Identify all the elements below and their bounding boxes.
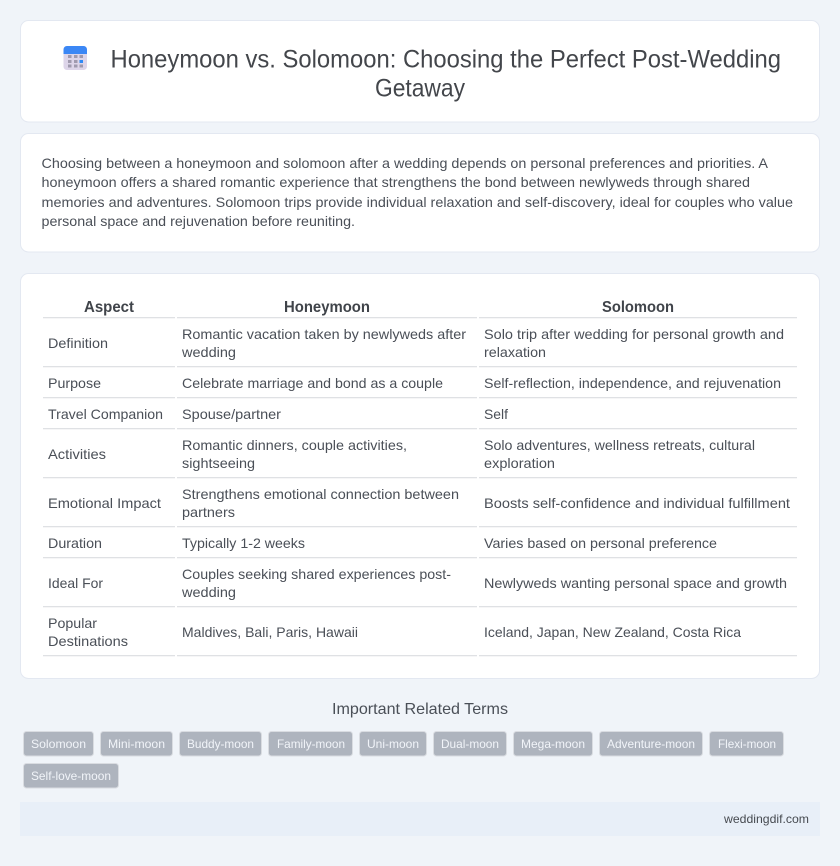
table row: ideal for: Ideal For: [48, 575, 103, 591]
text block: intro paragraph: honeymoon offers a shared romantic experience that strengthens the bond between newlyweds through shared: [42, 174, 750, 190]
table row: popular destinations: Destinations: [48, 633, 128, 649]
table row: definition: [48, 326, 784, 360]
text block: intro paragraph: Choosing between a honeymoon and solomoon after a wedding depends on personal preferences and priorities. A: [42, 155, 769, 171]
table row: activities: Romantic dinners, couple activities,: [182, 437, 407, 453]
table row: emotional impact: Boosts self-confidence and individual fulfillment: [484, 495, 790, 511]
table row: definition: Romantic vacation taken by newlyweds after: [182, 326, 466, 342]
table row: purpose: Purpose: [48, 375, 101, 391]
table row: activities: sightseeing: [182, 455, 255, 471]
table row: popular destinations: Popular: [48, 615, 97, 631]
footer source text: weddingdif.com: [723, 812, 809, 826]
panel: introduction text: [20, 134, 820, 252]
table row: definition: Definition: [48, 335, 108, 351]
table row: activities: Solo adventures, wellness retreats, cultural: [484, 437, 755, 453]
table row: duration: Typically 1-2 weeks: [182, 535, 305, 551]
text block: intro paragraph: personal space and rejuvenation before reuniting.: [42, 213, 355, 229]
table row: popular destinations: [48, 615, 741, 649]
table row: popular destinations: Iceland, Japan, New Zealand, Costa Rica: [484, 624, 741, 640]
table row: definition: wedding: [181, 344, 236, 360]
tag list: related terms: Buddy-moon: [187, 737, 254, 751]
table row: definition: Solo trip after wedding for personal growth and: [484, 326, 784, 342]
tag list: related terms: Uni-moon: [367, 737, 419, 751]
table row: emotional impact: [48, 486, 790, 520]
tag list: related terms: Solomoon: [31, 737, 86, 751]
table header row: Honeymoon: [284, 299, 370, 316]
tag list: related terms: [24, 732, 784, 788]
tag list: related terms: Family-moon: [277, 737, 345, 751]
table row: definition: relaxation: [484, 344, 546, 360]
panel: comparison table: [20, 274, 820, 678]
table row: emotional impact: Emotional Impact: [48, 495, 161, 511]
table row: travel companion: [48, 406, 508, 422]
table row: duration: Varies based on personal preference: [484, 535, 717, 551]
table row: purpose: Celebrate marriage and bond as a couple: [182, 375, 443, 391]
tag list: related terms: Mega-moon: [521, 737, 585, 751]
table row: purpose: Self-reflection, independence, and rejuvenation: [484, 375, 781, 391]
tag list: related terms: Mini-moon: [108, 737, 165, 751]
table row: activities: exploration: [484, 455, 555, 471]
table row: purpose: [48, 375, 781, 391]
table row: popular destinations: Maldives, Bali, Paris, Hawaii: [182, 624, 358, 640]
heading: title: Honeymoon vs. Solomoon: Choosing the Perfect Post-Wedding: [110, 46, 781, 74]
tag list: related terms: Flexi-moon: [718, 737, 776, 751]
table row: duration: Duration: [48, 535, 102, 551]
table row: travel companion: Self: [484, 406, 508, 422]
text block: intro paragraph: [42, 155, 793, 229]
table header row: [84, 299, 674, 316]
table row: ideal for: wedding: [181, 584, 236, 600]
footer bar: [20, 802, 820, 836]
table row: duration: [48, 535, 717, 551]
table row: emotional impact: Strengthens emotional connection between: [182, 486, 459, 502]
table row: activities: [48, 437, 755, 471]
panel: title header: [20, 20, 820, 122]
table row: emotional impact: partners: [182, 504, 235, 520]
table row: ideal for: Couples seeking shared experiences post-: [182, 566, 451, 582]
table header row: Solomoon: [602, 299, 674, 316]
heading: title: Getaway: [375, 74, 465, 102]
table row: ideal for: Newlyweds wanting personal space and growth: [484, 575, 787, 591]
table row: travel companion: Spouse/partner: [182, 406, 281, 422]
tag list: related terms: Self-love-moon: [31, 769, 111, 783]
text block: intro paragraph: memories and adventures. Solomoon trips provide individual relaxation and self-discovery, ideal for couples who value: [42, 194, 793, 210]
tag list: related terms: Adventure-moon: [607, 737, 695, 751]
table row: ideal for: [48, 566, 787, 600]
icon: calendar: [64, 46, 87, 70]
table row: travel companion: Travel Companion: [48, 406, 163, 422]
table header row: Aspect: [84, 299, 135, 316]
tag list: related terms: Dual-moon: [441, 737, 499, 751]
heading: title: [110, 46, 781, 102]
table row: activities: Activities: [48, 446, 106, 462]
heading: important related terms: Important Related Terms: [332, 701, 508, 718]
